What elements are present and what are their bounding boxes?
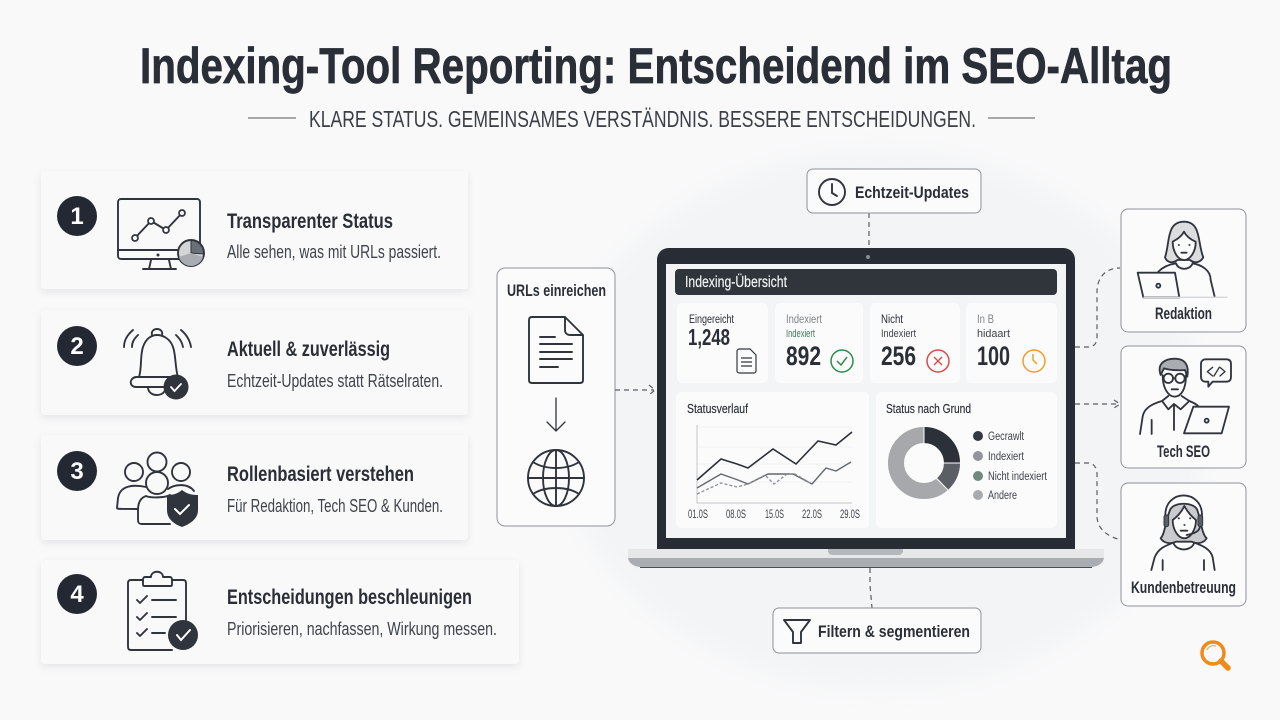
arrow: to Tech SEO [1075, 400, 1120, 408]
panel: card 1 Transparenter Status [41, 171, 468, 289]
heading: Aktuell & zuverlässig [227, 338, 390, 361]
callout: Filtern & segmentieren [773, 608, 981, 653]
callout: Filtern & segmentieren: Filtern & segmentieren [818, 622, 970, 641]
heading: Entscheidungen beschleunigen [227, 586, 472, 609]
panel: Statusverlauf line chart: 15.0S [765, 509, 784, 521]
number 3 [57, 451, 97, 491]
panel: Statusverlauf line chart: 01.0S [688, 509, 708, 521]
panel: card 3 Rollenbasiert verstehen [41, 435, 468, 540]
panel: Status nach Grund donut chart: Status nach Grund [886, 402, 971, 416]
callout: Echtzeit-Updates: Echtzeit-Updates [855, 183, 969, 202]
KPI: In Bearbeitung: 100 [977, 341, 1010, 371]
icon: orange magnifier [1202, 642, 1228, 668]
panel: Status nach Grund donut chart: Nicht indexiert [988, 471, 1048, 483]
screen [666, 264, 1066, 538]
KPI: Indexiert: Indexiert [786, 314, 823, 326]
KPI: Nicht indexiert: Nicht [881, 314, 904, 326]
icon: globe [528, 450, 584, 506]
arrow: urls to laptop [615, 385, 655, 395]
label: Redaktion [1155, 305, 1212, 323]
heading: Transparenter Status [227, 210, 393, 233]
heading: Rollenbasiert verstehen [227, 463, 414, 486]
icon: monitor with chart [118, 199, 204, 269]
laptop dashboard [628, 248, 1104, 568]
connector: to Kundenbetreuung [1075, 463, 1121, 540]
KPI: Nicht indexiert: 256 [881, 341, 916, 371]
KPI: Indexiert [775, 303, 863, 383]
number 2 [57, 326, 97, 366]
panel: Kundenbetreuung [1121, 483, 1246, 606]
panel: Statusverlauf line chart: 22.0S [802, 509, 822, 521]
KPI: Eingereicht: 1,248 [688, 324, 730, 350]
panel: card 2 Aktuell & zuverlässig [41, 310, 468, 415]
panel: Statusverlauf line chart [676, 392, 869, 528]
icon: support agent with headset [1151, 495, 1215, 570]
KPI: Nicht indexiert: Indexiert [881, 328, 916, 340]
panel: Status nach Grund donut chart [876, 392, 1057, 528]
KPI: Nicht indexiert [870, 303, 960, 383]
KPI: In Bearbeitung: hidaart [977, 328, 1010, 340]
connector: to Redaktion [1075, 268, 1120, 347]
subtitle: KLARE STATUS. GEMEINSAMES VERSTÄNDNIS. BESSERE ENTSCHEIDUNGEN. [309, 106, 976, 132]
KPI: Indexiert: 892 [786, 341, 821, 371]
number 2: 2 [70, 333, 84, 360]
connector: top [868, 213, 870, 248]
panel: card 4 Entscheidungen beschleunigen [41, 560, 519, 664]
KPI: Eingereicht: Eingereicht [689, 314, 735, 326]
panel: Statusverlauf line chart: 08.0S [726, 509, 746, 521]
KPI: In Bearbeitung [966, 303, 1057, 383]
KPI: Eingereicht [677, 303, 768, 383]
description: Für Redaktion, Tech SEO & Kunden. [227, 496, 443, 516]
panel: Status nach Grund donut chart: Gecrawlt [988, 431, 1025, 443]
icon: man with glasses and laptop [1140, 359, 1231, 434]
connector: bottom [870, 568, 872, 608]
number 4: 4 [70, 581, 84, 608]
icon: document [529, 317, 583, 383]
panel: Status nach Grund donut chart: Andere [988, 490, 1017, 502]
number 3: 3 [70, 458, 84, 485]
label: URLs einreichen [507, 281, 606, 300]
callout: Echtzeit-Updates [807, 169, 981, 213]
panel: Statusverlauf line chart: 29.0S [840, 509, 860, 521]
panel: Status nach Grund donut chart: Indexiert [988, 451, 1025, 463]
KPI: In Bearbeitung: In B [977, 314, 994, 326]
laptop body [657, 248, 1075, 549]
number 4 [57, 574, 97, 614]
laptop base [628, 549, 1104, 568]
description: Priorisieren, nachfassen, Wirkung messen. [227, 619, 497, 639]
icon: people with shield [117, 452, 198, 527]
panel: URLs einreichen [497, 268, 615, 526]
description: Alle sehen, was mit URLs passiert. [227, 242, 441, 262]
label: Kundenbetreuung [1131, 579, 1236, 597]
panel: Tech SEO [1121, 346, 1246, 468]
number 1: 1 [70, 203, 84, 230]
header bar [675, 269, 1057, 295]
label: Tech SEO [1157, 443, 1210, 461]
icon: bell [124, 329, 191, 400]
panel: Statusverlauf line chart: Statusverlauf [687, 402, 748, 416]
arrow: down [547, 398, 565, 431]
KPI: Indexiert: Indexiert [786, 328, 815, 340]
header bar: Indexing-Übersicht [685, 273, 788, 291]
icon: woman with laptop [1138, 222, 1227, 297]
description: Echtzeit-Updates statt Rätselraten. [227, 371, 443, 391]
icon: clipboard [128, 572, 198, 650]
panel: Redaktion [1121, 209, 1246, 332]
number 1 [57, 196, 97, 236]
